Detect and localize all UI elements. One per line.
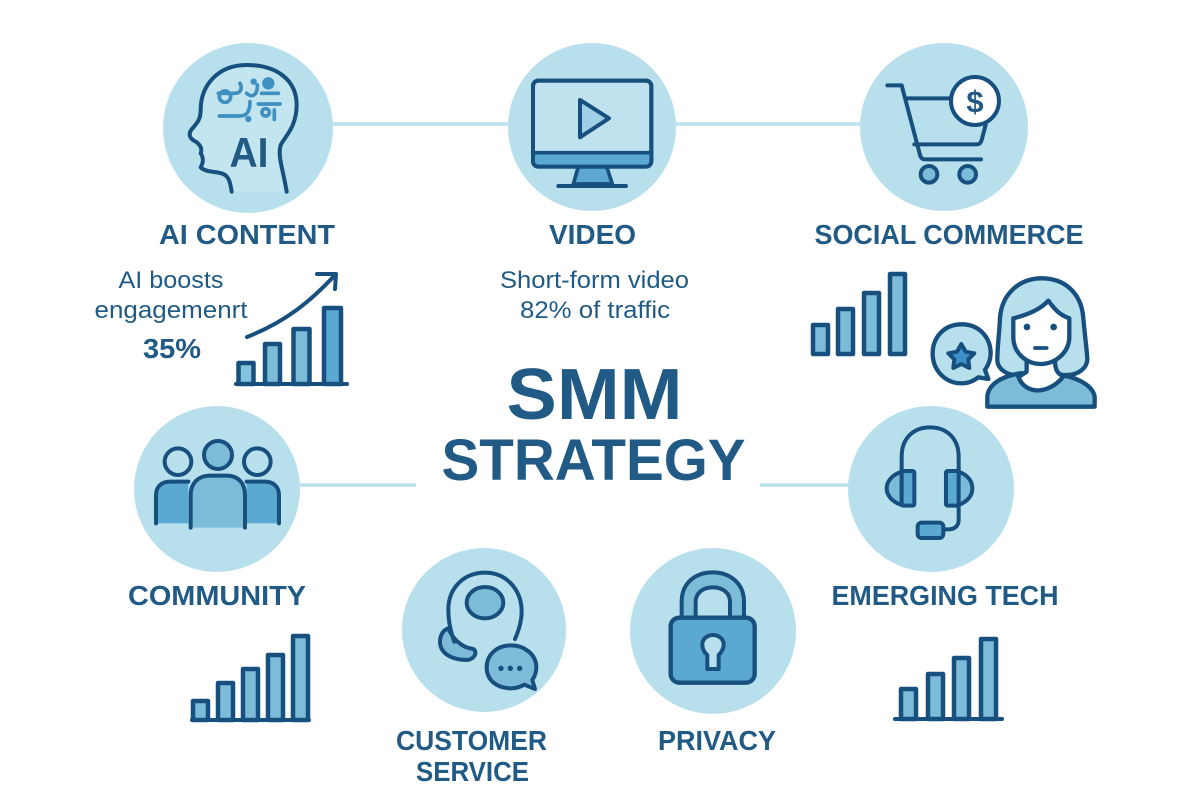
icon: video monitor [508, 43, 676, 211]
icon: AI head [163, 43, 333, 213]
face [1013, 301, 1069, 364]
connector: center to emerging tech [760, 483, 850, 487]
title: SMM [506, 355, 682, 435]
heading: customer service: CUSTOMER [396, 725, 547, 756]
chart: rising bars [192, 636, 309, 720]
heading: social commerce: SOCIAL COMMERCE [814, 219, 1084, 250]
icon: padlock [630, 548, 796, 714]
heading: video: VIDEO [549, 219, 636, 250]
speech bubble [933, 324, 991, 383]
text: AI engagement stat: engagemenrt [94, 297, 248, 324]
heading: privacy: PRIVACY [658, 725, 776, 756]
heading: community: COMMUNITY [128, 580, 306, 611]
heading: customer service: SERVICE [416, 756, 529, 787]
text: AI engagement stat: AI boosts [118, 267, 224, 294]
connector: video to social commerce [674, 122, 862, 126]
panel: community [128, 406, 309, 720]
shoulders [987, 373, 1095, 407]
icon: headset loop with chat bubble [402, 548, 566, 712]
title [442, 355, 746, 493]
chart: rising bars with arrow [236, 274, 347, 384]
icon: headset with microphone [848, 406, 1014, 572]
panel: video [500, 43, 689, 324]
heading: emerging tech: EMERGING TECH [832, 580, 1058, 611]
text: AI engagement stat [94, 267, 248, 364]
chart: rising bars [813, 274, 905, 354]
text: AI engagement stat: 35% [143, 333, 201, 364]
text: video traffic stat: 82% of traffic [520, 297, 670, 324]
connector: AI content to video [330, 122, 510, 126]
icon: person with star review bubble [933, 278, 1095, 407]
heading: AI content: AI CONTENT [159, 219, 335, 250]
icon: abstract glyph marks [218, 79, 280, 120]
icon: group of people [134, 406, 300, 572]
hair [997, 278, 1087, 375]
text: video traffic stat: Short-form video [500, 267, 689, 294]
chart: rising bars [895, 639, 1002, 719]
panel: social commerce [813, 43, 1095, 407]
panel: emerging tech [832, 406, 1058, 719]
text: video traffic stat [500, 267, 689, 324]
icon: AI head: AI [230, 129, 268, 176]
title: STRATEGY [442, 428, 746, 493]
icon: shopping cart with dollar coin [860, 43, 1028, 211]
connector: community to center [298, 483, 416, 487]
panel: AI content [94, 43, 347, 384]
neck [1018, 360, 1063, 390]
panel: customer service [396, 548, 566, 787]
panel: privacy [630, 548, 796, 756]
icon: shopping cart with dollar coin: $ [966, 84, 984, 119]
heading: customer service [396, 725, 547, 787]
